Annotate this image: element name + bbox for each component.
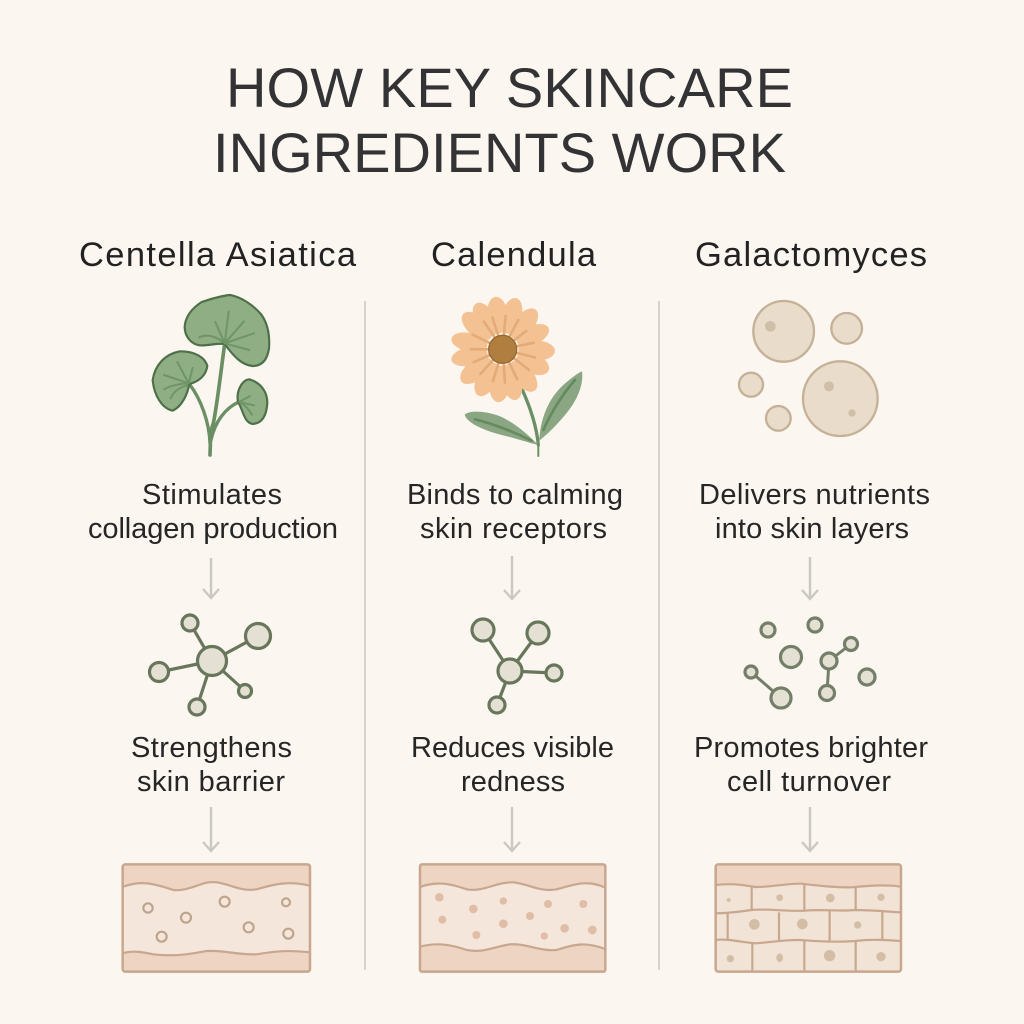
arrow bbox=[504, 556, 520, 599]
panel: Centella Asiatica bbox=[79, 236, 357, 972]
icon: centella plant bbox=[153, 295, 269, 455]
arrow bbox=[203, 807, 219, 851]
text: promotes brighter cell turnover bbox=[694, 732, 928, 798]
arrow bbox=[203, 558, 219, 598]
heading: Centella Asiatica: Centella Asiatica bbox=[79, 236, 357, 274]
text: delivers nutrients into skin layers: Delivers nutrients bbox=[699, 479, 930, 511]
skin diagram: cell layers bbox=[716, 864, 901, 972]
text: delivers nutrients into skin layers bbox=[699, 479, 930, 545]
icon: molecule bbox=[150, 615, 270, 715]
text: promotes brighter cell turnover: cell turnover bbox=[727, 766, 891, 798]
text: reduces visible redness: Reduces visible bbox=[411, 732, 614, 764]
text: reduces visible redness: redness bbox=[461, 766, 565, 798]
arrow bbox=[802, 807, 818, 851]
text: strengthens skin barrier: skin barrier bbox=[137, 766, 285, 798]
text: promotes brighter cell turnover: Promotes brighter bbox=[694, 732, 928, 764]
text: stimulates collagen production bbox=[88, 479, 338, 545]
arrow bbox=[802, 557, 818, 599]
panel: Galactomyces bbox=[694, 236, 930, 972]
text: stimulates collagen production: Stimulates bbox=[142, 479, 282, 511]
icon: scattered molecules bbox=[745, 618, 875, 708]
text: binds to calming skin receptors bbox=[407, 479, 623, 545]
title: HOW KEY SKINCARE bbox=[226, 56, 793, 119]
icon: yeast cells bbox=[739, 301, 878, 436]
skin diagram: barrier bbox=[123, 864, 310, 972]
title: INGREDIENTS WORK bbox=[213, 121, 786, 184]
text: delivers nutrients into skin layers: into skin layers bbox=[715, 513, 909, 545]
title bbox=[213, 56, 793, 184]
text: strengthens skin barrier: Strengthens bbox=[131, 732, 292, 764]
text: stimulates collagen production: collagen production bbox=[88, 513, 338, 545]
panel: Calendula bbox=[407, 236, 623, 972]
heading: Galactomyces: Galactomyces bbox=[695, 236, 927, 274]
arrow bbox=[504, 807, 520, 851]
text: strengthens skin barrier bbox=[131, 732, 292, 798]
text: reduces visible redness bbox=[411, 732, 614, 798]
text: binds to calming skin receptors: skin receptors bbox=[420, 513, 607, 545]
text: binds to calming skin receptors: Binds to calming bbox=[407, 479, 623, 511]
heading: Calendula: Calendula bbox=[431, 236, 597, 274]
icon: calendula flower bbox=[450, 295, 582, 456]
skin diagram: redness bbox=[420, 864, 605, 972]
icon: molecule bbox=[472, 619, 562, 713]
